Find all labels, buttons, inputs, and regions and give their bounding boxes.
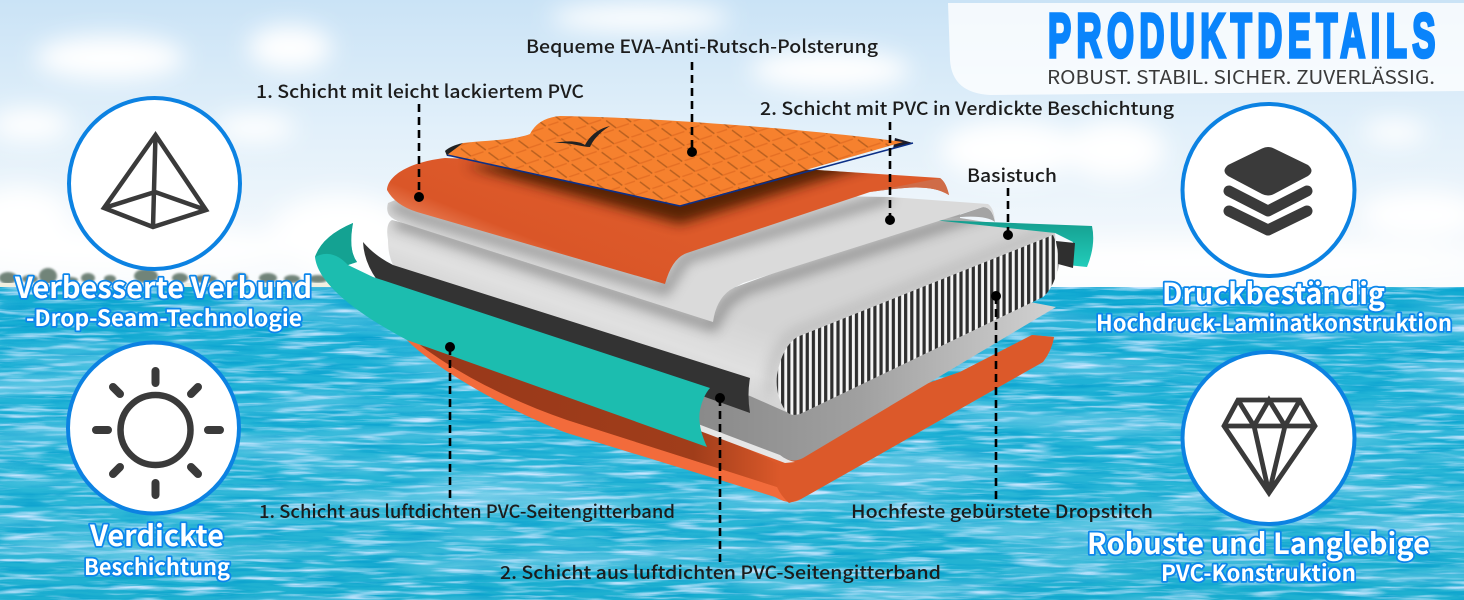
upper grey layer [387, 190, 995, 322]
orange EVA pad [445, 116, 913, 206]
callout: base cloth: Basistuch [967, 162, 1057, 188]
callout: layer 1 lacquered PVC: 1. Schicht mit leicht lackiertem PVC [256, 78, 584, 104]
striped dropstitch panel [777, 235, 1058, 415]
callout: layer 2 side band: 2. Schicht aus luftdichten PVC-Seitengitterband [500, 559, 941, 585]
feature text: Verbesserte Verbund: Verbesserte Verbund [14, 265, 312, 307]
title: PRODUKTDETAILS [1048, 1, 1441, 71]
callout: dropstitch [851, 291, 1153, 524]
board layer stack [315, 116, 1093, 503]
icon: sun in circle [68, 342, 239, 514]
feature text: Druckbeständig: Hochdruck-Laminatkonstruktion [1096, 306, 1452, 338]
callout: layer 1 lacquered PVC [256, 78, 584, 202]
callout: dropstitch: Hochfeste gebürstete Dropstitch [851, 498, 1153, 524]
feature text: Druckbeständig [1096, 271, 1452, 338]
dark band [363, 242, 750, 413]
callout: layer 2 PVC [760, 95, 1175, 225]
callout: layer 1 side band [259, 342, 675, 524]
icon: pyramid in circle [69, 98, 240, 269]
feature text: Druckbeständig: Druckbeständig [1162, 271, 1385, 313]
tree line on horizon [0, 268, 345, 287]
feature text: Verdickte Beschichtung: Verdickte [89, 513, 224, 555]
icon: diamond in circle [1182, 352, 1354, 524]
feature text: Robuste und Langlebige: PVC-Konstruktion [1161, 556, 1356, 588]
callout: layer 2 PVC: 2. Schicht mit PVC in Verdickte Beschichtung [760, 95, 1175, 121]
orange top sheet [387, 150, 949, 284]
feature text: Robuste und Langlebige: Robuste und Langlebige [1087, 521, 1430, 563]
lower grey layer [698, 285, 1056, 463]
icon: layers in circle [1182, 104, 1354, 276]
back teal strip [933, 220, 1093, 268]
feature text: Verdickte Beschichtung: Beschichtung [84, 550, 230, 582]
callout: base cloth [967, 162, 1057, 240]
header panel [948, 1, 1464, 95]
subtitle: ROBUST. STABIL. SICHER. ZUVERLÄSSIG. [1047, 63, 1435, 90]
body soft shadow [395, 212, 1055, 395]
callout: layer 2 side band [500, 393, 941, 585]
background sky with clouds [0, 0, 1464, 290]
callout: EVA padding: Bequeme EVA-Anti-Rutsch-Polsterung [526, 33, 879, 59]
main grey body [387, 205, 1058, 415]
callout: EVA padding [526, 33, 879, 157]
feature text: Verdickte Beschichtung [84, 513, 230, 582]
callout: layer 1 side band: 1. Schicht aus luftdichten PVC-Seitengitterband [259, 498, 675, 524]
feature text: Verbesserte Verbund [14, 265, 312, 333]
teal side band [315, 223, 710, 447]
feature text: Verbesserte Verbund: -Drop-Seam-Technologie [26, 301, 302, 333]
bottom orange layer [407, 335, 1054, 503]
icon: seagull [553, 126, 610, 147]
feature text: Robuste und Langlebige [1087, 521, 1430, 588]
sea [0, 287, 1464, 600]
